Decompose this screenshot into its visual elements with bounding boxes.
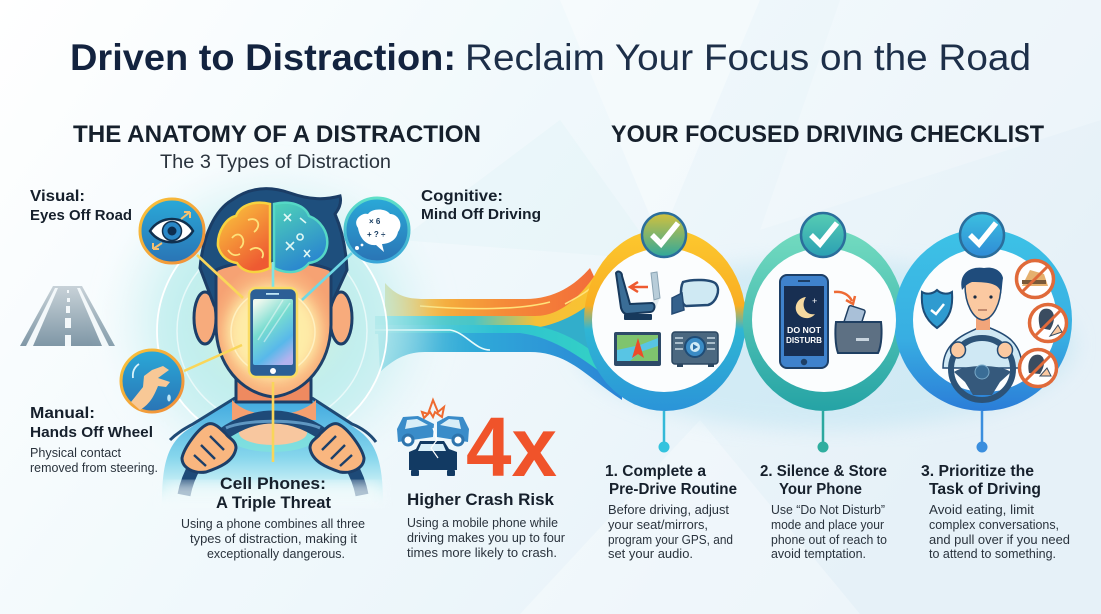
- checklist rings: [584, 229, 1072, 411]
- ears: [194, 292, 216, 344]
- face highlight: [227, 286, 319, 378]
- step 2 text: 2. Silence & Store: [760, 463, 887, 480]
- connector lines: [184, 253, 352, 371]
- step 1 text: 1. Complete a: [605, 463, 706, 480]
- step 3 text: complex conversations,: [929, 518, 1059, 532]
- connector: step 3: [976, 411, 988, 452]
- person: [943, 268, 1022, 368]
- step 3 text: Avoid eating, limit: [929, 503, 1035, 517]
- label: manual: Hands Off Wheel: [30, 424, 153, 441]
- left car: [397, 416, 434, 442]
- step 1 text: Before driving, adjust: [608, 503, 730, 517]
- check badge 3: [960, 213, 1004, 257]
- phone dnd: DISTURB: [786, 336, 822, 345]
- shirt: [162, 398, 383, 505]
- shield: [922, 290, 952, 328]
- icon: hand circle: [121, 350, 183, 412]
- burst: [422, 400, 444, 418]
- connector: step 1: [658, 411, 670, 452]
- text: cell phones triple threat: Cell Phones:: [220, 474, 326, 493]
- text: cell phones triple threat: exceptionally dangerous.: [207, 547, 345, 561]
- ring shadow glow: [575, 260, 1075, 430]
- connector: step 2: [818, 411, 828, 452]
- text: crash risk: driving makes you up to four: [407, 531, 565, 545]
- heading: anatomy of a distraction: THE ANATOMY OF A DISTRACTION: [73, 121, 481, 148]
- label: manual: [30, 405, 158, 475]
- halo glow: [101, 160, 445, 480]
- step 3 text: [921, 463, 1070, 561]
- no phone call: [1030, 304, 1066, 342]
- icon: cognitive circle: + ? ÷: [367, 230, 386, 239]
- gps: [614, 332, 661, 366]
- icon: eye circle: [140, 199, 204, 263]
- step 2 text: [760, 463, 887, 561]
- text: cell phones triple threat: Using a phone combines all three: [181, 517, 365, 531]
- no conversation: [1020, 350, 1056, 386]
- step 3 text: and pull over if you need: [929, 533, 1070, 547]
- label: manual: Physical contact: [30, 446, 122, 460]
- lower neck patch: [227, 418, 319, 452]
- step 2 text: mode and place your: [771, 518, 884, 532]
- label: manual: removed from steering.: [30, 461, 158, 475]
- icon group: do not disturb: [780, 275, 882, 368]
- check badge 2: [801, 213, 845, 257]
- check badge 1: [642, 213, 686, 257]
- mirror: [672, 280, 718, 314]
- front car: [409, 441, 457, 470]
- panel: driver illustration: [101, 160, 445, 506]
- brain: [218, 203, 327, 272]
- heading: anatomy of a distraction: The 3 Types of Distraction: [160, 152, 391, 173]
- icon group: driving task: [922, 260, 1066, 400]
- wheel: [950, 338, 1013, 400]
- label: cognitive: Cognitive:: [421, 188, 503, 205]
- step 2 text: Your Phone: [779, 481, 862, 498]
- hands on wheel: [182, 424, 364, 472]
- glovebox: [835, 305, 882, 353]
- text: cell phones triple threat: [181, 474, 365, 561]
- text: crash risk: Higher Crash Risk: [407, 490, 555, 509]
- step 1 text: program your GPS, and: [608, 533, 733, 547]
- step 3 text: to attend to something.: [929, 547, 1056, 561]
- phone dnd: DO NOT: [787, 326, 821, 335]
- title: Reclaim Your Focus on the Road: [465, 37, 1031, 78]
- icon group: pre-drive routine: [614, 272, 718, 367]
- step 1 text: your seat/mirrors,: [608, 518, 708, 532]
- seat: [616, 272, 660, 320]
- icon: cognitive circle: × 6: [369, 217, 381, 226]
- text: crash risk: [407, 490, 565, 560]
- flow ribbons: [300, 250, 622, 400]
- title: Driven to Distraction:: [70, 37, 456, 78]
- step 3 text: Task of Driving: [929, 481, 1041, 498]
- label: visual: Visual:: [30, 188, 85, 205]
- right car: [437, 416, 469, 442]
- heading: anatomy of a distraction: [73, 121, 481, 173]
- label: visual: Eyes Off Road: [30, 207, 132, 224]
- label: cognitive: Mind Off Driving: [421, 206, 541, 223]
- label: manual: Manual:: [30, 405, 95, 422]
- step 1 text: Pre-Drive Routine: [609, 481, 737, 498]
- hair: [200, 189, 347, 305]
- neck: [236, 378, 311, 402]
- phone dnd: +: [812, 296, 817, 306]
- audio unit: [672, 332, 718, 367]
- step 2 text: phone out of reach to: [771, 533, 887, 547]
- step 1 text: [605, 463, 737, 561]
- step 3 text: 3. Prioritize the: [921, 463, 1034, 480]
- label: visual: [30, 188, 132, 224]
- phone: [249, 288, 297, 377]
- text: cell phones triple threat: types of distraction, making it: [190, 532, 358, 546]
- face: [216, 261, 331, 397]
- step 2 text: avoid temptation.: [771, 547, 866, 561]
- step 2 text: Use “Do Not Disturb”: [771, 503, 885, 517]
- text: cell phones triple threat: A Triple Threat: [216, 493, 331, 512]
- step 1 text: set your audio.: [608, 547, 693, 561]
- no eating: [1016, 260, 1054, 298]
- icon: cognitive circle: [345, 198, 409, 262]
- steering wheel: [184, 417, 362, 495]
- text: crash risk: times more likely to crash.: [407, 546, 557, 560]
- fade under text: [165, 482, 380, 506]
- heading: focused driving checklist: YOUR FOCUSED DRIVING CHECKLIST: [611, 121, 1044, 148]
- phone dnd: [780, 275, 828, 368]
- stat: 4x: 4x: [466, 400, 557, 494]
- title: [70, 37, 1031, 78]
- icon: road: [20, 286, 115, 346]
- label: cognitive: [421, 188, 541, 223]
- text: crash risk: Using a mobile phone while: [407, 516, 558, 530]
- icon: crash cars: [397, 400, 469, 476]
- vertical beam: [272, 382, 274, 462]
- arrow: [834, 292, 855, 304]
